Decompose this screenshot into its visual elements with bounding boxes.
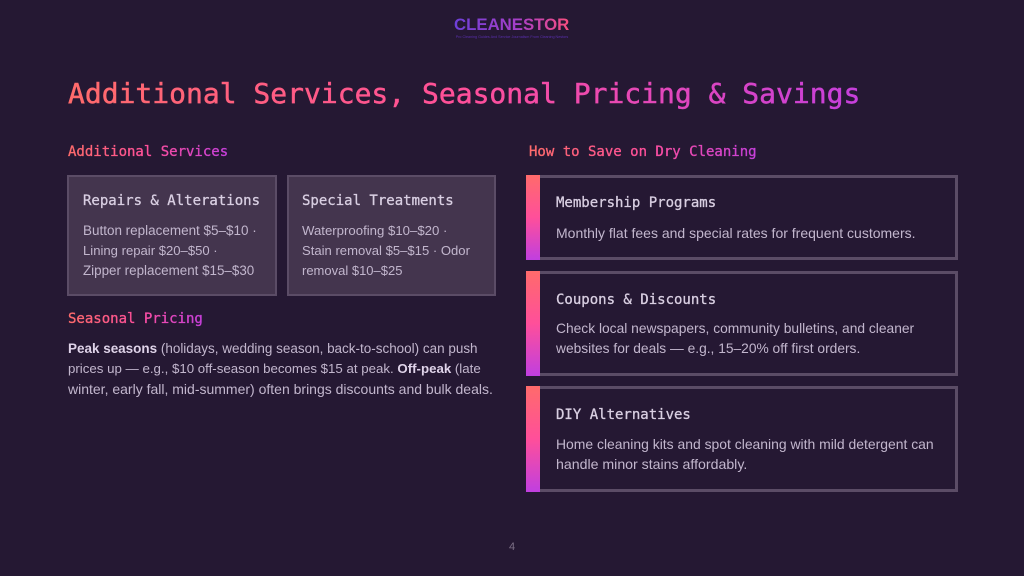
tip text: Home cleaning kits and spot cleaning with mild detergent can	[556, 436, 934, 452]
card text	[83, 223, 257, 278]
tip text: Check local newspapers, community bulletins, and cleaner	[556, 321, 914, 336]
card text: Waterproofing $10–$20 ·	[302, 223, 447, 238]
tip text: websites for deals — e.g., 15–20% off first orders.	[556, 341, 860, 356]
card text: Button replacement $5–$10 ·	[83, 223, 257, 238]
panel: coupons and discounts	[526, 271, 958, 376]
tip title: Membership Programs	[556, 195, 716, 211]
panel: diy alternatives	[526, 386, 958, 492]
tip text	[556, 321, 914, 356]
tip text: handle minor stains affordably.	[556, 456, 747, 472]
logo tagline: Pro Cleaning Guides And Service Journalism From Cleaning Nestors	[456, 35, 568, 39]
seasonal pricing text: prices up — e.g., $10 off-season becomes $15 at peak. Off-peak (late	[68, 361, 481, 376]
card text	[302, 223, 470, 278]
logo wordmark: CLEANESTOR	[454, 15, 569, 34]
heading: how to save: How to Save on Dry Cleaning	[529, 144, 757, 160]
tip text: Monthly flat fees and special rates for frequent customers.	[556, 225, 916, 241]
card text: Lining repair $20–$50 ·	[83, 243, 218, 258]
tip text	[556, 436, 934, 472]
panel: special treatments	[287, 175, 496, 296]
tip title: DIY Alternatives	[556, 407, 691, 423]
page number: 4	[509, 541, 515, 553]
card text: Stain removal $5–$15 · Odor	[302, 243, 470, 258]
panel: membership programs	[526, 175, 958, 260]
logo	[454, 15, 569, 39]
card title: Repairs & Alterations	[83, 193, 260, 209]
seasonal pricing text: Peak seasons (holidays, wedding season, back-to-school) can push	[68, 341, 478, 356]
seasonal pricing text: winter, early fall, mid-summer) often brings discounts and bulk deals.	[68, 381, 493, 397]
card text: Zipper replacement $15–$30	[83, 263, 254, 278]
card title: Special Treatments	[302, 193, 454, 209]
panel: repairs and alterations	[67, 175, 277, 296]
title: Additional Services, Seasonal Pricing & Savings	[68, 77, 860, 110]
heading: additional services: Additional Services	[68, 144, 228, 160]
heading: seasonal pricing: Seasonal Pricing	[68, 311, 203, 327]
seasonal pricing text	[68, 341, 493, 397]
tip title: Coupons & Discounts	[556, 292, 716, 308]
card text: removal $10–$25	[302, 263, 402, 278]
